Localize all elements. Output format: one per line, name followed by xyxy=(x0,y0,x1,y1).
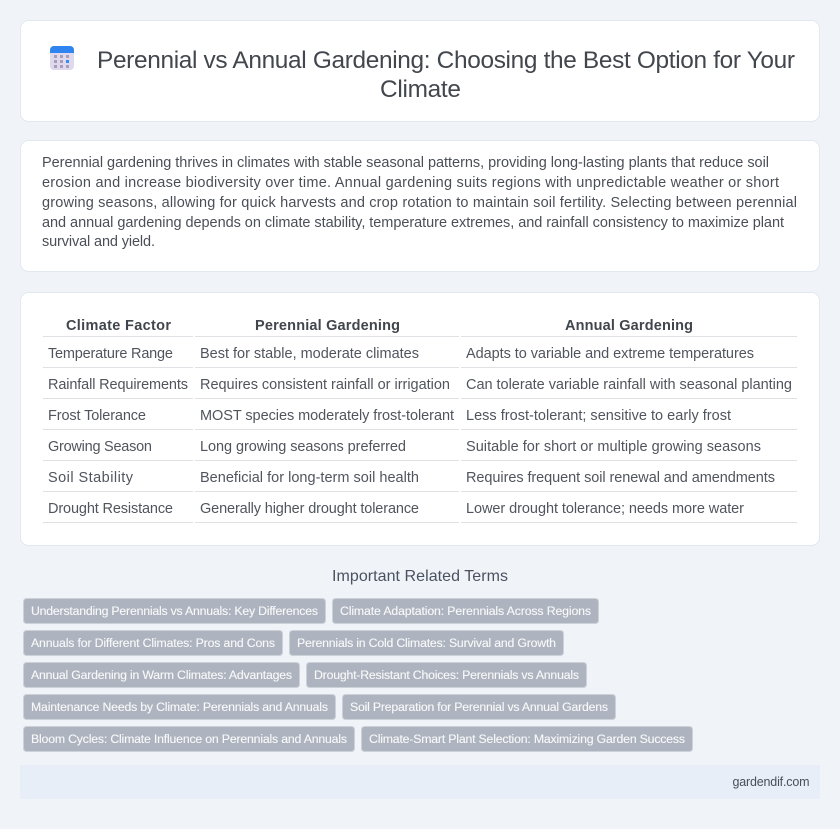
tag: Understanding Perennials vs Annuals: Key Differences xyxy=(31,604,318,618)
table header: Annual Gardening xyxy=(565,318,693,334)
tag: Perennials in Cold Climates: Survival and Growth xyxy=(297,636,556,650)
tag: Soil Preparation for Perennial vs Annual Gardens xyxy=(350,700,608,714)
tag xyxy=(24,598,326,624)
intro text: growing seasons, allowing for quick harvests and crop rotation to maintain soil fertility. Selecting between perennial xyxy=(42,195,797,211)
tag xyxy=(24,726,354,752)
table header: Perennial Gardening xyxy=(255,318,400,334)
title: Perennial vs Annual Gardening: Choosing the Best Option for Your xyxy=(97,47,795,74)
table rows: Soil Stability xyxy=(48,470,134,486)
footer xyxy=(20,765,820,799)
table rows: Rainfall Requirements xyxy=(48,377,188,393)
table rows: Can tolerate variable rainfall with seasonal planting xyxy=(466,377,792,393)
tag: Drought-Resistant Choices: Perennials vs Annuals xyxy=(314,668,579,682)
related term tags xyxy=(24,598,692,752)
table rows xyxy=(43,336,797,522)
table header xyxy=(66,318,693,334)
tag xyxy=(24,694,336,720)
icon: calendar xyxy=(50,46,74,70)
table rows: Beneficial for long-term soil health xyxy=(200,470,419,486)
table rows: Lower drought tolerance; needs more water xyxy=(466,501,744,517)
table rows: Requires frequent soil renewal and amendments xyxy=(466,470,775,486)
panel: title card xyxy=(20,20,820,122)
table rows: Long growing seasons preferred xyxy=(200,439,406,455)
table rows: Requires consistent rainfall or irrigation xyxy=(200,377,450,393)
title: Climate xyxy=(380,76,461,103)
footer source: gardendif.com xyxy=(732,775,810,789)
tag xyxy=(24,662,300,688)
table rows: Drought Resistance xyxy=(48,501,173,517)
table rows: Temperature Range xyxy=(48,346,173,362)
intro text: Perennial gardening thrives in climates with stable seasonal patterns, providing long-lasting plants that reduce soil xyxy=(42,155,769,171)
intro text: survival and yield. xyxy=(42,234,155,250)
table rows: Generally higher drought tolerance xyxy=(200,501,419,517)
tag xyxy=(332,598,598,624)
tag xyxy=(306,662,586,688)
heading: related terms: Important Related Terms xyxy=(332,568,508,585)
tag: Annuals for Different Climates: Pros and Cons xyxy=(31,636,275,650)
tag: Climate Adaptation: Perennials Across Regions xyxy=(340,604,591,618)
tag xyxy=(362,726,692,752)
panel: comparison table xyxy=(20,292,820,546)
panel: introduction xyxy=(20,140,820,272)
intro text: and annual gardening depends on climate stability, temperature extremes, and rainfall consistency to maximize plant xyxy=(42,215,784,231)
table rows: Growing Season xyxy=(48,439,152,455)
tag xyxy=(342,694,616,720)
table rows: Adapts to variable and extreme temperatures xyxy=(466,346,754,362)
tag xyxy=(24,630,282,656)
table rows: Frost Tolerance xyxy=(48,408,146,424)
table rows: Best for stable, moderate climates xyxy=(200,346,419,362)
table rows: Less frost-tolerant; sensitive to early frost xyxy=(466,408,731,424)
intro text: erosion and increase biodiversity over time. Annual gardening suits regions with unpredictable weather or short xyxy=(42,175,779,191)
table rows: Suitable for short or multiple growing seasons xyxy=(466,439,761,455)
tag: Climate-Smart Plant Selection: Maximizing Garden Success xyxy=(369,732,685,746)
table header: Climate Factor xyxy=(66,318,171,334)
tag: Annual Gardening in Warm Climates: Advantages xyxy=(31,668,292,682)
tag xyxy=(290,630,564,656)
tag: Bloom Cycles: Climate Influence on Perennials and Annuals xyxy=(31,732,347,746)
tag: Maintenance Needs by Climate: Perennials and Annuals xyxy=(31,700,328,714)
table rows: MOST species moderately frost-tolerant xyxy=(200,408,454,424)
